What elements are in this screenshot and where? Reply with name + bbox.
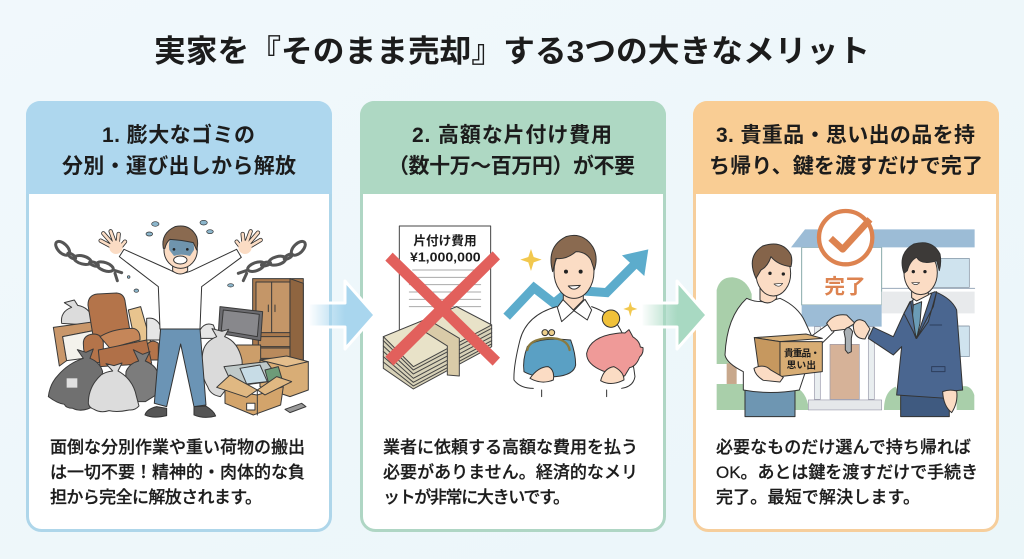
box label: 貴重品・ [784,348,820,360]
light bag right [202,329,242,397]
arrow: panel 2 to 3 [641,281,707,349]
jeans [154,328,206,407]
panel 2 frame [362,102,664,530]
arrow: panel 1 to 2 [308,281,375,349]
house [802,247,882,305]
panel 1 body text: 担から完全に解放されます。 [50,488,262,507]
panel 2 heading [388,124,635,178]
panel 3 body text: 完了。最短で解決します。 [716,488,920,507]
sweat drops [127,220,234,292]
panel 2 body text: ットが非常に大きいです。 [383,487,570,507]
panel 1 heading: 1. 膨大なゴミの [102,123,255,147]
purse [524,330,576,377]
man head [563,287,583,310]
wardrobe [253,279,303,360]
key [844,327,853,353]
illustration: man freed among junk [48,220,308,417]
cardboard back [260,360,308,397]
panel 1 body text: は一切不要！精神的・肉体的な負 [50,463,305,482]
red cross [385,251,500,366]
panel 3 heading: 3. 貴重品・思い出の品を持 [716,124,975,147]
title: 実家を『そのまま売却』する3つの大きなメリット [154,34,870,69]
completion label: 完了 [824,275,866,298]
hands [101,231,261,254]
up arrow chart [507,249,648,317]
panel 2 body text: 必要がありません。経済的なメリ [383,462,638,482]
illustration: key handover in front of house [717,211,975,417]
panel: 1 release from garbage [26,101,332,530]
panel 3 heading: ち帰り、鍵を渡すだけで完了 [709,155,983,178]
tv [218,307,263,341]
shirt [119,249,241,329]
front cardboard box [224,362,280,387]
panel 2 body text [383,438,638,507]
illustration: crossed-out bill and saving man: ¥1,000,000 [410,250,481,264]
panel 3 body text: 必要なものだけ選んで持ち帰れば [716,438,971,457]
box [754,334,822,377]
panel 3 body text: OK。あとは鍵を渡すだけで手続き [716,463,978,482]
panel: 3 hand over the keys [693,101,999,530]
panel 2 body text: 業者に依頼する高額な費用を払う [383,438,638,457]
check badge [819,211,872,264]
box: 思い出 [787,360,816,372]
panel 2 heading: 2. 高額な片付け費用 [412,124,612,147]
panel 1 heading: 分別・運び出しから解放 [62,155,296,178]
piggy bank [587,330,643,376]
panel 2 header [360,101,666,194]
panel 1 frame [28,102,330,530]
panel 3 header [693,101,999,194]
collar [557,299,592,322]
illustration: crossed-out bill and saving man [383,226,648,397]
banknote stack [383,307,492,389]
junk pile [48,279,308,415]
panel 3 heading [709,124,983,178]
panel 1 body text [50,438,305,507]
light bag front [88,363,139,412]
dark bag mid [125,350,157,402]
panel 1 body text: 面倒な分別作業や重い荷物の搬出 [50,438,305,457]
dark bag left [48,349,103,410]
saving man body [514,307,635,397]
agent [853,243,963,417]
panel: 2 no cleanup cost [360,101,666,530]
buyer [725,244,834,417]
head [173,258,188,274]
hands [530,367,624,383]
sparkles [520,249,637,317]
panel 3 frame [694,102,998,530]
chains [53,239,308,281]
coin [602,310,620,327]
panel 2 heading: （数十万～百万円）が不要 [388,154,635,178]
panel 3 body text [716,438,978,507]
trees [717,277,752,364]
invoice [399,226,491,330]
panel 1 heading [62,123,296,178]
panel 1 header [26,101,332,194]
shoes [145,406,216,417]
invoice text: 片付け費用 [413,233,477,248]
